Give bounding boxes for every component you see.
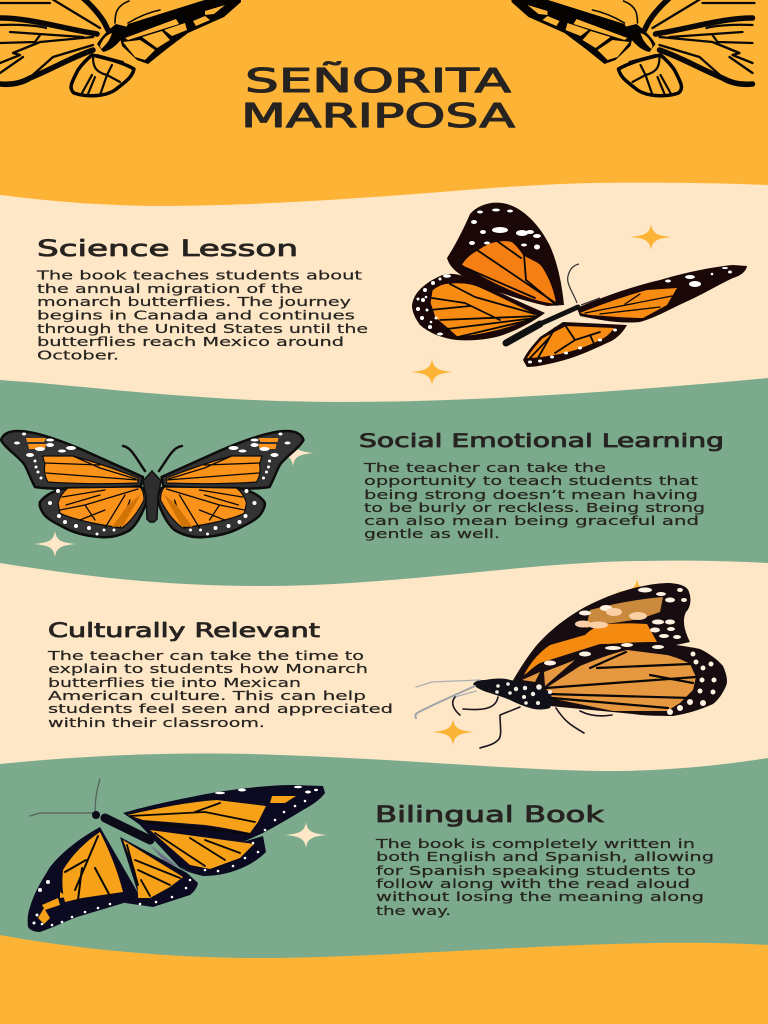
heading: science lesson: Science Lesson	[37, 237, 298, 262]
text block: bilingual book: without losing the meaning along	[376, 889, 704, 904]
text block: culturally relevant: butterflies tie into Mexican	[48, 675, 301, 690]
text block: social emotional learning: The teacher can take the	[362, 460, 606, 475]
icon: monarch butterfly, wings open at an angle	[412, 203, 747, 367]
icon: illustrated monarch butterfly, symmetrical	[1, 431, 304, 537]
icon: outline butterfly top right	[512, 0, 754, 96]
text block: culturally relevant: American culture. This can help	[48, 688, 366, 703]
heading: bilingual book: Bilingual Book	[375, 803, 604, 828]
text block: culturally relevant: students feel seen and appreciated	[48, 701, 393, 716]
text block: social emotional learning: opportunity to teach students that	[364, 473, 698, 488]
icon: sparkle	[630, 224, 672, 250]
text block: social emotional learning: gentle as well.	[364, 526, 500, 541]
text block: social emotional learning: can also mean being graceful and	[364, 513, 699, 528]
text block: science lesson: begins in Canada and continues	[37, 308, 355, 322]
text block: science lesson: The book teaches students about	[35, 268, 362, 282]
text block: culturally relevant: The teacher can take the time to	[46, 648, 364, 663]
icon: sparkle	[616, 579, 658, 605]
text block: bilingual book	[374, 836, 714, 918]
icon: sparkle	[432, 719, 474, 745]
text block: culturally relevant: within their classroom.	[48, 715, 265, 730]
text block: social emotional learning: being strong doesn’t mean having	[364, 487, 698, 502]
text block: science lesson	[35, 268, 368, 362]
panel: science lesson band	[0, 183, 768, 500]
text block: science lesson: the annual migration of the	[37, 281, 303, 296]
text block: science lesson: butterflies reach Mexico around	[37, 334, 344, 349]
panel: social emotional learning band	[0, 378, 768, 650]
text block: bilingual book: follow along with the read aloud	[376, 876, 690, 891]
text block: science lesson: October.	[37, 348, 119, 362]
panel: science lesson text	[35, 237, 368, 362]
icon: monarch butterfly, dorsal angled view	[28, 779, 325, 932]
heading: social emotional learning: Social Emotional Learning	[359, 430, 724, 452]
title: MARIPOSA	[241, 96, 516, 135]
title	[241, 61, 516, 135]
text block: culturally relevant: explain to students how Monarch	[48, 661, 368, 676]
icon: sparkle	[34, 531, 76, 557]
icon: outline butterfly top left	[0, 0, 241, 96]
icon: monarch butterfly, side view	[415, 583, 727, 748]
text block: bilingual book: the way.	[376, 903, 451, 918]
icon: sparkle	[272, 440, 314, 466]
text block: social emotional learning	[362, 460, 705, 541]
icon: sparkle	[285, 822, 327, 848]
text block: science lesson: through the United States until the	[37, 321, 368, 336]
text block: bilingual book: for Spanish speaking students to	[376, 863, 696, 878]
panel: bilingual book text	[374, 803, 714, 918]
panel: culturally relevant text	[46, 619, 393, 730]
heading: culturally relevant: Culturally Relevant	[48, 619, 320, 642]
text block: culturally relevant	[46, 648, 393, 730]
panel: social emotional learning text	[359, 430, 724, 541]
text block: bilingual book: The book is completely written in	[374, 836, 695, 851]
panel: culturally relevant band	[0, 561, 768, 850]
icon: sparkle	[411, 359, 453, 385]
panel: bilingual book band	[0, 754, 768, 1000]
title: SEÑORITA	[245, 61, 512, 100]
text block: social emotional learning: to be burly or reckless. Being strong	[364, 500, 705, 515]
text block: bilingual book: both English and Spanish, allowing	[376, 849, 714, 864]
panel: bottom orange band	[0, 935, 768, 1024]
text block: science lesson: monarch butterflies. The journey	[37, 294, 352, 309]
